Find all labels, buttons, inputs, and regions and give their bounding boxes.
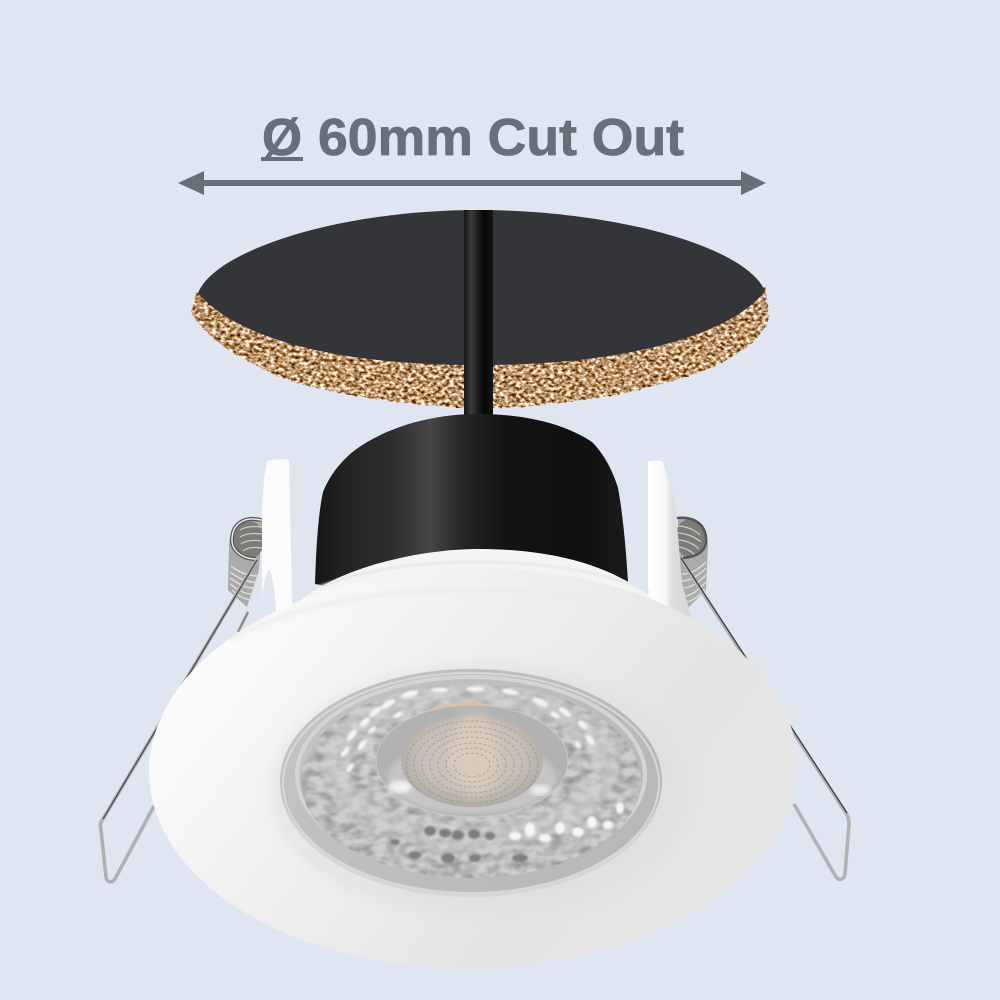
cable stem [464, 210, 493, 416]
lens [280, 669, 662, 897]
right white tab [648, 460, 692, 625]
left white tab [262, 459, 292, 625]
central bulb [401, 713, 543, 809]
coil [675, 518, 708, 610]
board face: black top [198, 210, 765, 365]
upper left sparkle [339, 686, 596, 773]
left spring clip [100, 518, 264, 882]
wire arm [100, 560, 257, 882]
white bezel [146, 549, 800, 974]
outer rim [280, 671, 662, 897]
lower dark facets [390, 826, 528, 863]
collar step [290, 549, 665, 640]
inner ring [297, 677, 645, 873]
heading: 60mm cut out: 60mm Cut Out [318, 109, 684, 167]
coil [228, 518, 264, 607]
right spring clip [675, 518, 849, 879]
wire arm [680, 558, 849, 879]
bezel disc [146, 562, 800, 974]
lower wire [238, 612, 248, 632]
ceiling board cross-section [191, 210, 769, 408]
black housing [315, 414, 628, 600]
warm reflection [428, 702, 505, 715]
collar around bulb [376, 705, 568, 817]
arrow: cut out width [178, 171, 766, 195]
heading: 60mm cut out: Ø [262, 109, 302, 167]
faceted reflector [296, 680, 646, 880]
lower right sparkle [509, 802, 624, 842]
soft shading around lens [270, 664, 690, 916]
board edge: wood chip [191, 288, 769, 408]
ridge lines [310, 562, 650, 592]
